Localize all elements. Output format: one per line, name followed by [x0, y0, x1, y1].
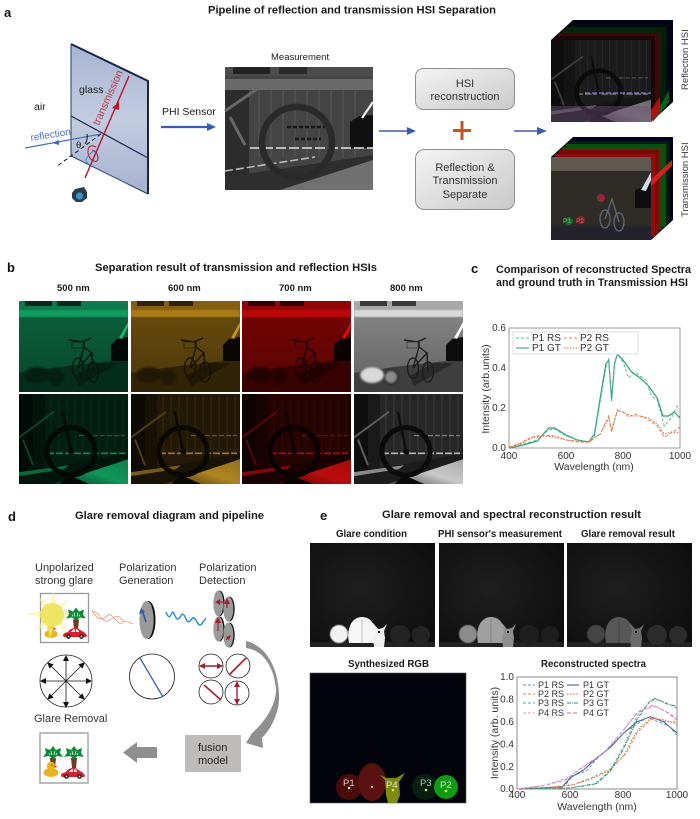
box: fusion model: fusion	[198, 742, 227, 754]
panel label b: b	[7, 260, 15, 275]
line chart: reconstructed spectra: 600	[562, 790, 579, 801]
panel label a: a	[4, 5, 12, 20]
line chart: transmission spectra: Intensity (arb.units)	[480, 344, 492, 434]
line chart: transmission spectra: 0.2	[492, 403, 506, 414]
image: sensor measurement	[439, 543, 564, 647]
arrow	[514, 127, 547, 135]
box: fusion model: model	[198, 755, 228, 767]
caption: glare removal: Glare Removal	[34, 713, 107, 725]
image headings	[336, 529, 676, 540]
icon: polarizer disc	[139, 601, 156, 639]
box: reflection and transmission separate: Transmission	[432, 175, 498, 187]
line chart: reconstructed spectra: 400	[509, 790, 526, 801]
title: comparison: and ground truth in Transmission HSI	[496, 277, 688, 289]
image grid: reflection row	[19, 394, 463, 484]
box: HSI reconstruction	[416, 68, 514, 110]
arrow: PHI sensor: PHI Sensor	[162, 106, 216, 118]
image headings: Glare condition	[336, 529, 407, 540]
chart legend: P4 GT	[583, 708, 610, 718]
line chart: reconstructed spectra: 0.0	[500, 784, 514, 795]
box: reflection and transmission separate: Separate	[443, 189, 487, 201]
diagram: glass with reflection and transmission rays: air	[34, 101, 46, 113]
captions: diagram stages: strong glare	[35, 575, 93, 587]
icon: plus	[453, 121, 471, 140]
captions: diagram stages: Detection	[199, 575, 245, 587]
title: comparison: Comparison of reconstructed Spectra	[496, 264, 692, 276]
hyperspectral cube: transmission: P2	[576, 218, 584, 225]
chart legend: P2 RS	[538, 689, 564, 699]
diagram: glass with reflection and transmission rays: θ	[76, 140, 81, 151]
arrow: detection to fusion model	[246, 641, 279, 748]
line chart: transmission spectra: 600	[558, 451, 575, 462]
image: synthesized RGB: P3	[420, 778, 432, 789]
diagram: glass with reflection and transmission rays: glass	[79, 84, 104, 96]
chart legend	[521, 680, 610, 720]
label: transmission HSI: Transmission HSI	[680, 142, 691, 217]
title: comparison	[496, 264, 692, 289]
chart legend: P2 RS	[580, 333, 609, 344]
line chart: reconstructed spectra	[489, 672, 689, 813]
heading: synthesized RGB: Synthesized RGB	[348, 659, 429, 670]
line chart: reconstructed spectra: 0.4	[500, 740, 514, 750]
image: synthesized RGB: P1	[343, 778, 355, 789]
chart legend: P3 GT	[583, 698, 610, 708]
hyperspectral cube: transmission	[551, 137, 673, 240]
chart legend	[513, 332, 638, 354]
diagram: glass with reflection and transmission rays	[25, 44, 148, 194]
line chart: transmission spectra: 400	[501, 451, 518, 462]
wavelength column headings: 600 nm	[168, 283, 201, 294]
image headings: PHI sensor's measurement	[438, 529, 563, 540]
heading: reconstructed spectra: Reconstructed spectra	[541, 659, 646, 670]
line chart: transmission spectra: 0.0	[492, 443, 506, 454]
chart legend: P2 GT	[580, 343, 609, 354]
title: separation result: Separation result of transmission and reflection HSIs	[95, 262, 377, 274]
image: glare condition	[310, 543, 435, 647]
line chart: transmission spectra: 0.4	[492, 363, 506, 374]
panel label e: e	[320, 508, 327, 523]
image: synthesized RGB: P2	[440, 780, 452, 791]
line chart: reconstructed spectra: 1.0	[500, 672, 514, 683]
scene with unpolarized glare	[26, 590, 88, 642]
wavelength column headings: 500 nm	[57, 283, 90, 294]
captions: diagram stages: Polarization	[199, 562, 256, 574]
label: reflection HSI: Reflection HSI	[680, 29, 691, 90]
chart legend: P3 RS	[538, 698, 564, 708]
line chart: reconstructed spectra: 800	[615, 790, 632, 801]
line chart: reconstructed spectra: Wavelength (nm)	[557, 801, 637, 813]
diagram: glass with reflection and transmission rays: reflection	[30, 127, 72, 144]
circle: unpolarized directions	[40, 655, 92, 707]
scene after glare removal	[40, 733, 88, 783]
chart legend: P1 RS	[538, 680, 564, 690]
box: reflection and transmission separate: Reflection &	[435, 162, 495, 174]
title: pipeline: Pipeline of reflection and transmission HSI Separation	[208, 4, 496, 16]
box: reflection and transmission separate	[416, 150, 514, 210]
wave: polarized light	[166, 612, 206, 625]
line chart: reconstructed spectra: Intensity (arb. units)	[489, 687, 501, 779]
image headings: Glare removal result	[581, 529, 676, 540]
image: synthesized RGB: P4	[386, 780, 398, 791]
arrow: PHI sensor	[161, 106, 216, 131]
box: HSI reconstruction: HSI	[456, 78, 474, 90]
chart legend: P1 GT	[583, 680, 610, 690]
circle: generated polarization	[130, 654, 174, 699]
line chart: transmission spectra: Wavelength (nm)	[554, 461, 634, 473]
title: glare removal diagram: Glare removal diagram and pipeline	[75, 510, 264, 522]
diagram: glass with reflection and transmission rays: transmission	[91, 68, 126, 127]
icon: camera sensor	[72, 187, 87, 202]
line chart: transmission spectra: 1000	[669, 451, 692, 462]
line chart: reconstructed spectra: 1000	[666, 790, 689, 801]
captions: diagram stages: Generation	[119, 575, 173, 587]
line chart: transmission spectra: 800	[615, 451, 632, 462]
line chart: transmission spectra	[480, 323, 692, 473]
image grid: transmission row	[19, 301, 463, 392]
image: glare removal output	[567, 543, 692, 647]
hyperspectral cube: reflection	[551, 20, 673, 122]
line chart: reconstructed spectra: 0.8	[500, 694, 514, 706]
chart legend: P2 GT	[583, 689, 610, 699]
wavelength column headings: 700 nm	[279, 283, 312, 294]
line chart: transmission spectra: 0.6	[492, 323, 506, 334]
arrow: fusion to glare removal	[123, 742, 157, 763]
circles: four detection orientations	[199, 654, 250, 705]
image: PHI measurement	[225, 67, 373, 190]
caption: measurement: Measurement	[271, 52, 329, 63]
wave: unpolarized light	[92, 610, 133, 624]
title: glare removal result: Glare removal and spectral reconstruction result	[382, 509, 641, 521]
panel label c: c	[471, 261, 478, 276]
captions: diagram stages: Polarization	[119, 562, 176, 574]
wavelength column headings: 800 nm	[390, 283, 423, 294]
chart legend: P4 RS	[538, 708, 564, 718]
icon: polarization detector discs	[213, 591, 235, 647]
captions: diagram stages: Unpolarized	[35, 562, 94, 574]
chart legend: P1 GT	[532, 343, 561, 354]
hyperspectral cube: transmission: P1	[563, 218, 571, 225]
panel label d: d	[8, 509, 16, 524]
arrow	[379, 127, 416, 135]
captions: diagram stages	[35, 562, 256, 587]
chart legend: P1 RS	[532, 333, 561, 344]
line chart: reconstructed spectra: 0.6	[500, 717, 514, 728]
box: fusion model	[185, 735, 241, 772]
box: HSI reconstruction: reconstruction	[430, 91, 500, 103]
line chart: reconstructed spectra: 0.2	[500, 762, 514, 773]
image: synthesized RGB	[310, 673, 466, 803]
wavelength column headings	[57, 283, 423, 294]
